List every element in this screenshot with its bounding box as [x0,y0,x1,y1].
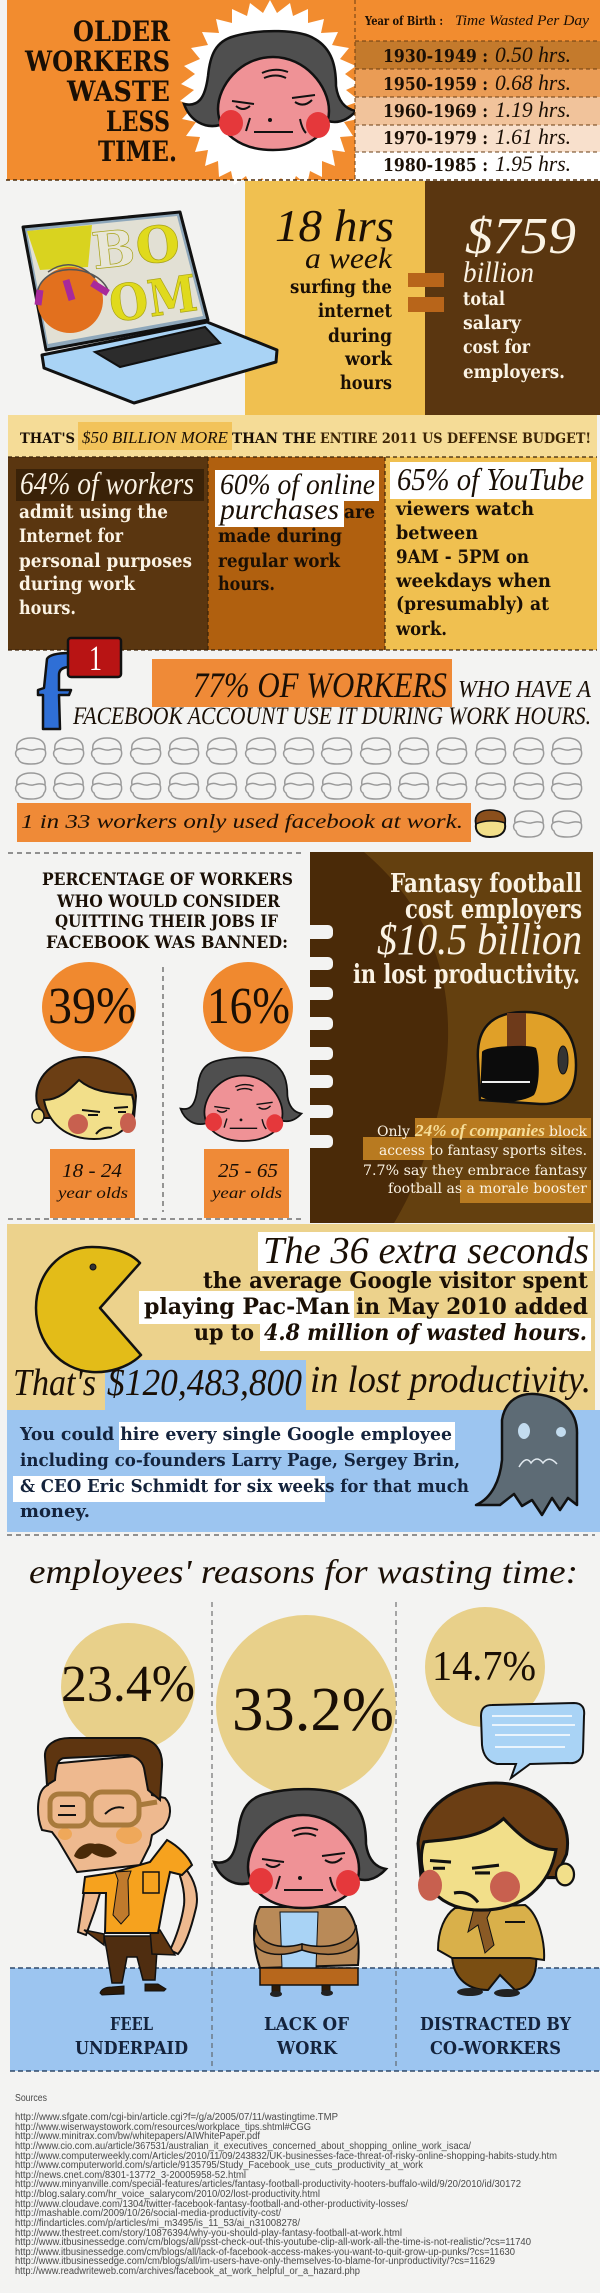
white highlights [13,1232,593,1502]
blue background [7,1410,600,1532]
sources list: http://www.itbusinessedge.com/cm/blogs/all/psst-check-out-this-youtube-clip-all-work-all-the-time-is-not-realistic/?cs=11740 [15,2237,531,2248]
sources list: http://www.computerworld.com/s/article/9135795/Study_Facebook_use_cuts_productivity_at_work [15,2160,424,2171]
stat: $759 billion: $759 [465,208,576,265]
stat: 33.2%: 33.2% [232,1676,394,1744]
table rows [355,41,600,180]
worker icon grid [16,738,582,837]
woman: head [214,1789,386,1908]
text highlights [363,1118,591,1203]
stat: 64% of workers: admit using the [19,501,168,523]
labels: UNDERPAID [75,2038,188,2059]
sources list: http://www.minitrax.com/bw/whitepapers/AIWhitePaper.pdf [15,2131,260,2142]
stat: 18 hrs a week: surfing the [290,276,392,298]
text: 36 extra seconds: the average Google visitor spent [203,1268,589,1294]
text: 36 extra seconds: playing Pac-Man [144,1294,350,1320]
character: woman lacking work [214,1789,386,1997]
age label: 25-65: 25 - 65 [218,1160,278,1182]
man: arms [170,1868,197,1954]
laptop screen lettering: BO [89,213,183,281]
stat: $759 billion: cost for [463,336,531,358]
stat: 64% of workers [8,457,208,650]
text: hire every google employee [19,1424,469,1522]
panel: defense budget band [8,415,597,457]
stat: 16% [203,962,293,1052]
woman: jacket [254,1907,359,1968]
stat: 65% of YouTube viewers: 65% of YouTube [397,461,584,497]
text: company block stats: Only [377,1124,410,1140]
stat: 18 hrs a week: work [344,348,393,370]
text: company block stats: block [549,1124,588,1140]
table values: 1.61 hrs. [495,124,571,149]
icon: ghost [476,1394,577,1515]
stat: 60% of online purchases: hours. [218,573,275,595]
icon: football helmet [478,1012,576,1104]
band text [20,428,591,447]
title [24,15,177,168]
table heading [364,13,589,29]
panel: pac-man [7,1224,600,1535]
stat: 65% of YouTube viewers: 9AM - 5PM on [396,546,529,568]
table: year of birth vs time wasted [355,0,600,180]
sources list: http://www.itbusinessedge.com/cm/blogs/all/im-users-have-only-themselves-to-blame-for-unproductivity/?cs=11629 [15,2256,495,2267]
age label: 18-24 [50,1149,135,1218]
text: 1 in 33 workers: 1 in 33 workers only used facebook at work. [21,811,463,833]
sources list [15,2093,557,2277]
heading: fantasy football cost [353,869,582,990]
man: glasses [50,1792,157,1826]
text: hire every google employee: & CEO Eric Schmidt for six weeks for that much [20,1476,469,1497]
face: older woman [184,31,356,150]
stat: 64% of workers: personal purposes [19,550,192,572]
man: tie [113,1871,131,1924]
labels: FEEL [110,2014,153,2035]
text: lost productivity: That's [13,1362,96,1404]
stat: 16%: 16% [207,978,290,1035]
icon: equals sign [408,273,444,312]
man: head [38,1755,170,1872]
text: hire every google employee: including co-founders Larry Page, Sergey Brin, [20,1450,460,1471]
distracted man: legs [452,1954,536,1990]
sources list: http://findarticles.com/p/articles/mi_m3495/is_11_53/ai_n31008278/ [15,2218,300,2229]
heading: reasons for wasting time: employees' reasons for wasting time: [29,1554,578,1591]
stat: 60% of online purchases: purchases [218,493,339,526]
stat: $759 billion: employers. [463,361,565,383]
sources list: http://www.cio.com.au/article/367531/australian_it_executives_concerned_about_shopping_online_work_isaca/ [15,2141,471,2152]
stat: 64% of workers: 64% of workers [20,465,194,501]
title: LESS [106,105,170,138]
band background [8,415,597,457]
stat: 65% of YouTube viewers: viewers watch [395,498,534,520]
icon: laptop [23,212,277,403]
text: 36 extra seconds: in May 2010 added [356,1294,588,1320]
laptop screen lettering: OM [105,263,201,334]
title: TIME. [98,135,177,168]
sources list: http://www.thestreet.com/story/10876394/why-you-should-play-fantasy-football-at-work.html [15,2228,402,2239]
title: OLDER [73,15,171,48]
sources list: http://www.readwriteweb.com/archives/facebook_at_work_helpful_or_a_hazard.php [15,2266,360,2277]
title: WORKERS [24,45,170,78]
sources list: Sources [15,2093,47,2104]
stat: 39%: 39% [48,978,136,1035]
woman: skirt [260,1968,358,1985]
table values: 1950-1959 : [383,74,488,95]
age label: 25-65 [204,1149,289,1218]
panel: employees' reasons [10,1554,600,2071]
panel: fantasy football [304,852,593,1223]
sources list: http://www.minyanville.com/special-features/articles/fantasy-football-productivity-hooters-buffalo-wild/9/20/2010/id/30172 [15,2179,521,2190]
brown column [425,181,600,415]
sources list: http://news.cnet.com/8301-13772_3-20005958-52.html [15,2170,246,2181]
man: eyes [58,1806,124,1815]
sources list: http://blog.salary.com/hr_voice_salarycom/2010/02/lost-productivity.html [15,2189,320,2200]
stat: 65% of YouTube viewers: (presumably) at [396,593,549,615]
panel: quitting over facebook ban [8,853,305,1219]
table values: 0.68 hrs. [495,70,571,95]
band text: $50 BILLION MORE [82,428,229,447]
panel: older workers header [6,0,600,190]
text: company block stats [363,1121,588,1197]
heading: percentage of workers [42,870,293,953]
panel: facebook [16,638,591,842]
stat: $759 billion: billion [463,256,534,289]
heading: 77% of workers: WHO HAVE A [458,677,591,703]
text: company block stats: access to fantasy sports sites. [379,1143,587,1159]
sources list: http://www.itbusinessedge.com/cm/blogs/all/lack-of-facebook-access-makes-you-want-to-quit-grow-up-punks/?cs=11630 [15,2247,515,2258]
table values: 1.95 hrs. [495,151,571,176]
darker curved shape [310,852,448,1223]
yellow column [245,181,425,415]
labels: LACK OF [264,2014,349,2035]
stat: 18 hrs a week: a week [305,242,393,275]
face: older worker [181,1057,301,1141]
starburst behind face [180,0,360,190]
table heading: Year of Birth : [364,14,443,28]
heading: percentage of workers: QUITTING THEIR JOBS IF [55,912,278,932]
sources list: http://www.wiserwaystowork.com/resources/workplace_tips.shtml#CGG [15,2122,311,2133]
stat: 60% of online purchases: are [344,501,375,523]
stat: 65% of YouTube viewers: work. [395,618,447,640]
stat: 60% of online purchases: 60% of online [220,468,375,501]
distracted man: head [418,1783,574,1910]
stat: 65% of YouTube viewers [385,457,597,650]
man: pocket [143,1872,159,1893]
man: hair [45,1738,162,1800]
text: 36 extra seconds [144,1230,589,1346]
blue highlight [105,1360,306,1410]
table values: 1.19 hrs. [495,97,571,122]
band text: THAN THE [232,431,316,447]
character: distracted man [418,1703,584,1997]
labels: WORK [276,2038,338,2059]
sources list: http://www.cloudave.com/1304/twitter-facebook-fantasy-football-and-other-productivity-losses/ [15,2199,408,2210]
panel: internet surfing cost [23,181,600,415]
stat: 18 hrs a week: 18 hrs [275,200,394,251]
text: hire every google employee: money. [20,1501,90,1522]
table values [383,42,571,176]
stat: 60% of online purchases [208,457,385,650]
heading: 77% of workers [72,665,591,730]
highlight: 1 in 33 [17,803,471,842]
icon: speech bubble [481,1703,584,1778]
table values: 1980-1985 : [383,155,488,176]
stat: 18 hrs a week: during [328,325,392,347]
stat: 64% of workers: during work [19,573,136,595]
stat: 14.7%: 14.7% [432,1644,536,1690]
text: lost productivity [13,1359,591,1404]
labels [75,2014,572,2059]
labels: CO-WORKERS [430,2038,561,2059]
age label: 25-65: year olds [210,1185,282,1202]
stat: 14.7% [425,1607,545,1727]
table values: 1970-1979 : [383,128,488,149]
laptop screen lettering [89,213,201,334]
text: 36 extra seconds: 4.8 million of wasted hours. [264,1320,587,1346]
table values: 0.50 hrs. [495,42,571,67]
stat: 18 hrs a week: internet [318,300,392,322]
panel: three stats [8,457,597,650]
stat: 60% of online purchases: regular work [218,550,341,572]
stat: 65% of YouTube viewers: weekdays when [395,570,551,592]
man: pants and shoes [104,1936,158,1983]
heading: percentage of workers: PERCENTAGE OF WORKERS [42,870,293,890]
stat: 64% of workers: hours. [19,597,76,619]
sources list: http://mashable.com/2009/10/26/social-media-productivity-cost/ [15,2208,281,2219]
table values: 1960-1969 : [383,101,488,122]
sources list: http://www.computerweekly.com/Articles/2010/11/09/243832/UK-businesses-face-threat-of-risky-online-shopping-habits-study.htm [15,2151,557,2162]
woman: shoes [272,1985,330,1992]
stat: 23.4%: 23.4% [61,1656,195,1713]
notebook tabs [304,925,333,1148]
man: moustache [74,1843,117,1859]
header orange background [7,0,600,180]
labels: DISTRACTED BY [420,2014,572,2035]
man: cheeks [58,1828,72,1840]
heading: 77% of workers: 77% OF WORKERS [193,665,447,705]
title: WASTE [66,75,170,108]
table heading: Time Wasted Per Day [455,13,589,29]
heading: percentage of workers: WHO WOULD CONSIDER [56,892,281,912]
icon: facebook f with notification: 1 [89,638,102,678]
highlight [78,422,232,450]
stat: 64% of workers: Internet for [19,525,124,547]
brown background [310,852,593,1223]
text: lost productivity: $120,483,800 [107,1362,302,1404]
stat: $759 billion: total [463,288,505,310]
text: company block stats: 24% of companies [414,1121,545,1140]
icon: pac-man [36,1247,141,1372]
sources list: http://www.sfgate.com/cgi-bin/article.cgi?f=/g/a/2005/07/11/wastingtime.TMP [15,2112,338,2123]
heading: percentage of workers: FACEBOOK WAS BANNED: [46,933,288,953]
woman: arms [254,1925,358,1954]
man: orange shirt [83,1840,192,1933]
icon: highlighted worker [476,810,505,837]
age label: 18-24: year olds [56,1185,128,1202]
character: underpaid man [38,1738,197,1995]
heading: fantasy football cost: $10.5 billion [377,915,582,964]
icon: facebook f with notification [38,638,121,729]
woman: blue shirt [280,1912,318,1968]
stat: $759 billion [463,208,576,383]
stat: 23.4% [61,1623,195,1751]
stat: $759 billion: salary [463,312,522,334]
blue label band [10,1968,600,2071]
highlight [152,659,452,707]
text: 36 extra seconds: The 36 extra seconds [263,1230,589,1272]
distracted man: shirt [438,1905,544,1960]
face: young worker [32,1057,136,1139]
band text: THAT'S [20,431,75,447]
stat: 18 hrs a week [275,200,394,394]
stat: 18 hrs a week: hours [340,372,392,394]
text: company block stats: football as a morale booster [388,1181,587,1197]
stat: 39% [42,962,136,1052]
text: lost productivity: in lost productivity. [310,1359,591,1401]
stat: 60% of online purchases: made during [218,525,342,547]
table values: 1930-1949 : [383,46,488,67]
text: hire every google employee: You could hire every single Google employee [19,1424,452,1445]
stat: 33.2% [216,1615,396,1797]
age label: 18-24: 18 - 24 [62,1160,122,1182]
tan background [7,1224,595,1410]
text: 36 extra seconds: up to [194,1320,254,1346]
text: company block stats: 7.7% say they embrace fantasy [363,1163,587,1179]
stat: 65% of YouTube viewers: between [396,522,478,544]
